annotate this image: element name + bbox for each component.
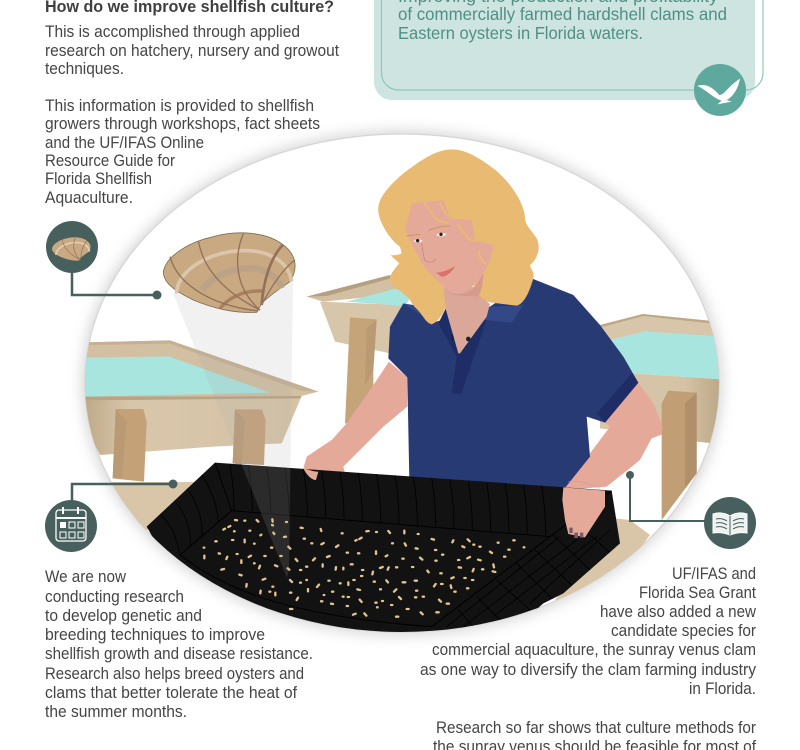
text block: breeding research: shellfish growth and disease resistance. xyxy=(45,645,313,663)
text block: applied research xyxy=(45,23,339,78)
researcher body xyxy=(303,278,663,490)
text block: breeding research: to develop genetic and xyxy=(45,607,202,625)
text block: information for growers: and the UF/IFAS Online xyxy=(45,134,204,152)
text block: sunray venus clam: Research so far shows that culture methods for xyxy=(436,719,756,737)
text block: information for growers: Aquaculture. xyxy=(45,189,133,207)
callout text: of commercially farmed hardshell clams and xyxy=(398,4,727,24)
head and hair xyxy=(378,149,539,353)
illustration: researcher at clam nursery xyxy=(82,131,722,673)
text block: information for growers: This information is provided to shellfish xyxy=(45,97,314,115)
panel: mission callout xyxy=(374,0,763,100)
tray xyxy=(146,462,620,632)
text block: applied research: research on hatchery, nursery and growout xyxy=(45,42,339,60)
shirt xyxy=(388,278,638,490)
left tank xyxy=(85,340,318,482)
text block: sunray venus clam xyxy=(420,565,757,750)
icon: seagull badge xyxy=(694,64,746,116)
callout text: Eastern oysters in Florida waters. xyxy=(398,23,643,43)
callout: calendar icon and leader xyxy=(45,480,178,552)
text block: breeding research xyxy=(45,568,313,721)
text block: sunray venus clam: as one way to diversify the clam farming industry xyxy=(420,661,757,679)
hands on tray xyxy=(303,468,605,538)
text block: information for growers: Florida Shellfish xyxy=(45,170,152,188)
shell xyxy=(163,233,295,312)
text block: breeding research: We are now xyxy=(45,568,126,586)
text block: breeding research: the summer months. xyxy=(45,703,187,721)
light beam xyxy=(173,282,293,578)
callout text xyxy=(398,0,727,43)
text block: applied research: This is accomplished through applied xyxy=(45,23,300,41)
right arm xyxy=(563,383,663,490)
text block: breeding research: Research also helps breed oysters and xyxy=(45,665,304,683)
text block: information for growers xyxy=(45,97,320,207)
text block: breeding research: conducting research xyxy=(45,588,184,606)
floor xyxy=(90,482,650,600)
callout: book icon and leader xyxy=(626,471,756,549)
text block: sunray venus clam: in Florida. xyxy=(689,680,756,698)
seeds xyxy=(204,519,524,617)
text block: breeding research: clams that better tolerate the heat of xyxy=(45,684,297,702)
back tank xyxy=(307,275,413,423)
left arm xyxy=(303,362,407,480)
text block: sunray venus clam: commercial aquaculture, the sunray venus clam xyxy=(432,641,756,659)
text block: sunray venus clam: Florida Sea Grant xyxy=(639,584,756,602)
text block: sunray venus clam: candidate species for xyxy=(611,622,756,640)
text block: information for growers: Resource Guide for xyxy=(45,152,175,170)
text block: sunray venus clam: UF/IFAS and xyxy=(672,565,756,583)
callout: shell icon and leader xyxy=(46,221,162,300)
text block: breeding research: breeding techniques to improve xyxy=(45,626,265,644)
text block: sunray venus clam: have also added a new xyxy=(600,603,756,621)
text block: applied research: techniques. xyxy=(45,60,124,78)
text block: information for growers: growers through workshops, fact sheets xyxy=(45,115,320,133)
right tank xyxy=(600,314,719,520)
